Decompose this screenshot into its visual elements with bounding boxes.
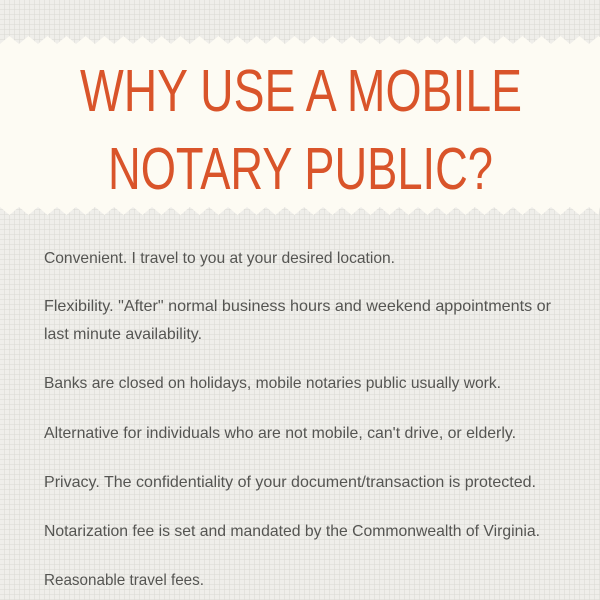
body text list xyxy=(44,250,552,589)
item: banks: Banks are closed on holidays, mobile notaries public usually work. xyxy=(44,375,501,392)
item: travel fees: Reasonable travel fees. xyxy=(44,572,204,589)
title banner xyxy=(0,36,600,215)
title: NOTARY PUBLIC? xyxy=(108,136,493,202)
item: convenient: Convenient. I travel to you at your desired location. xyxy=(44,250,395,267)
item: flexibility: last minute availability. xyxy=(44,326,202,343)
item: privacy: Privacy. The confidentiality of your document/transaction is protected. xyxy=(44,474,536,491)
item: fee: Notarization fee is set and mandated by the Commonwealth of Virginia. xyxy=(44,523,540,540)
item: flexibility xyxy=(44,298,552,343)
item: flexibility: Flexibility. "After" normal business hours and weekend appointments or xyxy=(44,298,552,315)
item: alternative: Alternative for individuals who are not mobile, can't drive, or elderly. xyxy=(44,425,516,442)
title xyxy=(80,58,522,202)
